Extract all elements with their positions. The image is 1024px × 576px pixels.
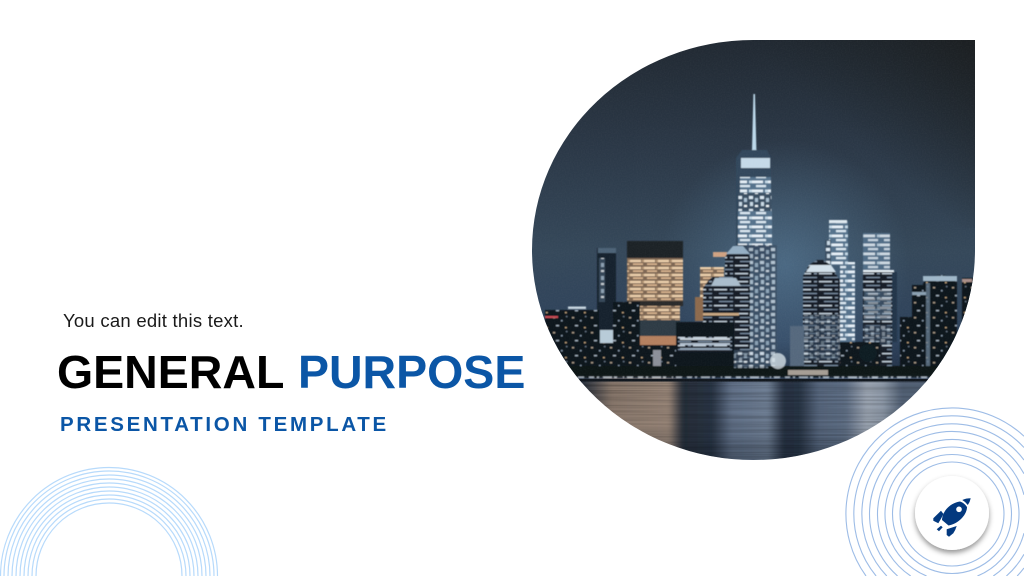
speckled column beside centre	[747, 245, 777, 372]
text: intro line: You can edit this text.	[63, 310, 244, 331]
water reflection	[578, 376, 930, 460]
concentric rings bottom right	[846, 408, 1024, 576]
orange lit building	[627, 241, 683, 345]
shore lights	[540, 376, 975, 378]
spire	[752, 94, 756, 150]
photo: night city skyline in drop shape	[524, 38, 984, 469]
water fade	[635, 426, 872, 460]
dome tower	[803, 260, 840, 370]
centre dark building	[725, 246, 750, 370]
glow behind towers	[686, 161, 880, 366]
main tower	[736, 150, 772, 258]
subtitle: PRESENTATION TEMPLATE	[60, 412, 389, 436]
photo grain	[530, 38, 977, 383]
small orange building	[695, 252, 727, 321]
foreground waterfront	[574, 350, 936, 378]
right cluster	[900, 275, 974, 373]
far tall tower	[825, 220, 855, 344]
shoreline	[578, 379, 928, 382]
domed centre building	[702, 276, 741, 323]
low black building	[676, 322, 734, 367]
water streaks	[584, 382, 926, 458]
icon: rocket	[933, 498, 971, 537]
left slim tower	[597, 248, 616, 343]
low left district	[545, 302, 676, 378]
skyline buildings	[540, 94, 975, 378]
dark top-right corner	[876, 40, 975, 201]
title: general purpose: GENERAL PURPOSE	[57, 346, 525, 398]
third tower	[863, 233, 897, 369]
badge: white circle with rocket	[915, 476, 989, 550]
night sky	[530, 38, 977, 383]
badge circle	[915, 476, 989, 550]
mid low buildings	[790, 326, 880, 372]
concentric rings bottom left	[0, 468, 218, 576]
